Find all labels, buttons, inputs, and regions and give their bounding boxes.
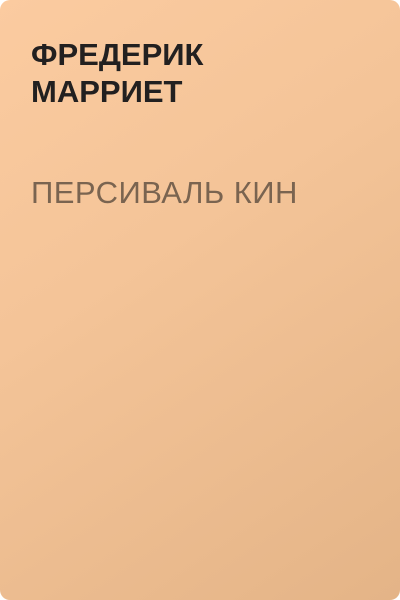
title: author name <box>31 37 204 109</box>
title: author name: МАРРИЕТ <box>31 74 182 109</box>
heading: book title: ПЕРСИВАЛЬ КИН <box>31 175 298 210</box>
title: author name: ФРЕДЕРИК <box>31 37 203 72</box>
